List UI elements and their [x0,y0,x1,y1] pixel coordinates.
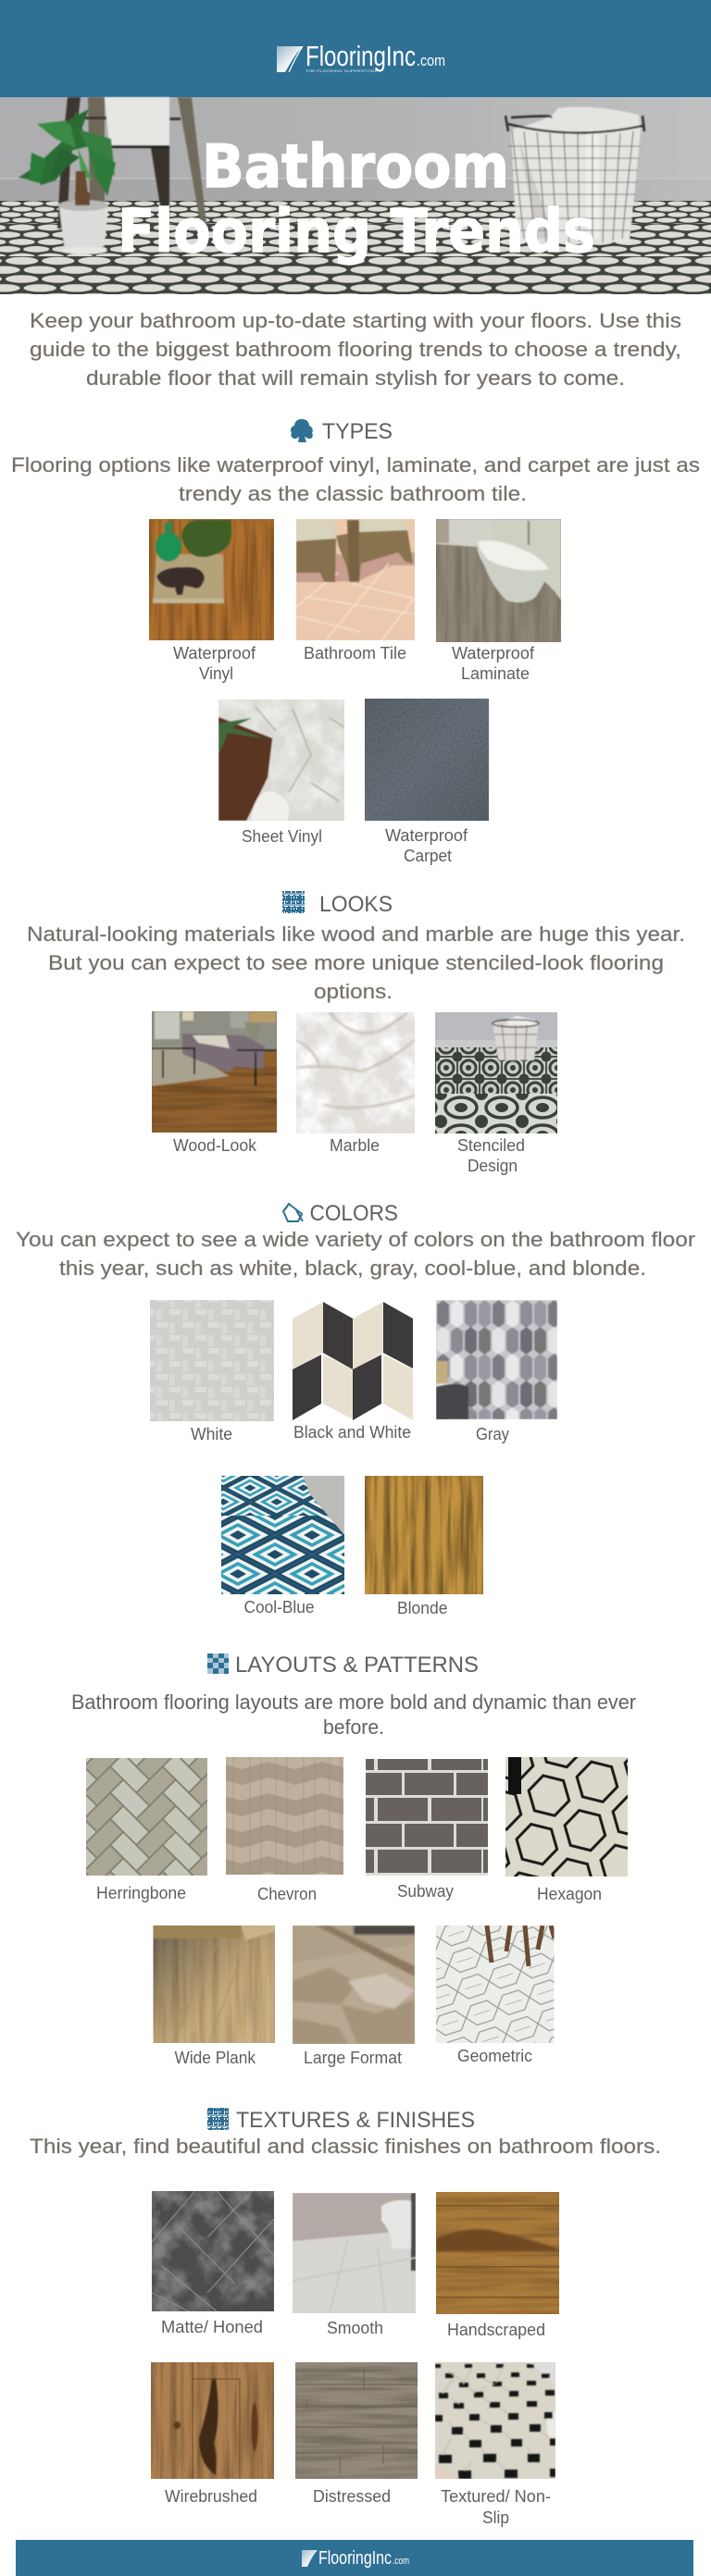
caption: Sheet Vinyl [242,827,322,846]
card: textured non-slip [435,2362,555,2527]
heading: looks: LOOKS [319,892,393,917]
icon: tree [291,419,313,442]
caption: Herringbone [96,1884,186,1902]
photo [435,1012,557,1133]
photo [221,1476,344,1594]
caption: Design [468,1157,518,1175]
photo [293,1926,415,2044]
card: large format [293,1926,415,2067]
photo [293,2193,416,2313]
description: before. [323,1715,384,1739]
caption [441,2487,551,2527]
card: waterproof laminate [436,519,561,683]
heading: looks [282,891,393,917]
intro text [30,309,681,390]
caption [173,644,256,683]
photo [365,1476,483,1594]
description [16,1228,695,1280]
card: herringbone [86,1758,207,1902]
card: waterproof vinyl [149,519,274,683]
panel: layouts and patterns [71,1653,636,2067]
panel: textures and finishes [30,2108,661,2527]
card: marble [296,1012,415,1155]
heading: layouts and patterns: LAYOUTS & PATTERNS [235,1653,479,1678]
footer logo: .com [393,2556,409,2567]
card: distressed [295,2362,418,2506]
photo [226,1757,343,1875]
description: options. [314,980,393,1003]
photo [365,699,489,821]
card: wirebrushed [151,2362,274,2506]
panel: types [11,419,700,865]
card: blonde [365,1476,483,1617]
intro text: guide to the biggest bathroom flooring trends to choose a trendy, [30,338,681,361]
card: handscraped [436,2192,559,2339]
footer logo: FlooringInc [318,2548,392,2569]
card: smooth [293,2193,416,2337]
caption: Gray [476,1425,509,1443]
caption: Distressed [313,2487,391,2506]
caption [385,826,468,865]
caption: Bathroom Tile [304,644,406,663]
caption [452,644,535,683]
panel: looks [27,891,685,1175]
card: subway [366,1759,488,1901]
caption: Waterproof [452,644,535,663]
photo [296,1012,415,1133]
description: You can expect to see a wide variety of colors on the bathroom floor [16,1228,695,1251]
description [11,453,700,505]
title: Bathroom [202,133,509,202]
photo [150,1300,274,1421]
logo: FlooringInc.com: .com [417,52,445,69]
photo [218,700,344,821]
card: white [150,1300,274,1443]
card: gray [436,1300,557,1443]
description: this year, such as white, black, gray, cool-blue, and blonde. [59,1257,646,1280]
card: black and white [293,1302,413,1442]
card: cool-blue [221,1476,344,1616]
footer band [16,2540,693,2576]
icon: woven tiles [207,2108,229,2130]
photo [86,1758,207,1876]
caption: Smooth [327,2319,383,2337]
card: wide plank [154,1926,276,2067]
icon: checkerboard [207,1653,229,1674]
card: bathroom tile [296,519,415,663]
photo [436,519,561,642]
logo: FlooringInc.com: FlooringInc [306,40,416,72]
caption: Wood-Look [173,1136,257,1155]
caption: Wide Plank [174,2049,256,2067]
photo [436,1926,554,2043]
caption: Handscraped [447,2321,545,2339]
description: This year, find beautiful and classic finishes on bathroom floors. [30,2135,661,2158]
photo [152,2191,274,2311]
header band [0,0,711,97]
caption: Waterproof [385,826,468,845]
caption: Cool-Blue [244,1598,315,1616]
card: wood-look [152,1011,277,1155]
card: matte honed [152,2187,274,2336]
caption: Vinyl [199,664,233,683]
caption: Large Format [304,2049,402,2067]
caption: White [191,1425,232,1443]
photo [435,2362,555,2479]
heading: types [291,419,393,444]
description [27,923,685,1003]
caption: Marble [330,1136,380,1155]
caption: Carpet [404,847,452,865]
caption: Slip [482,2508,509,2527]
photo [366,1759,488,1876]
card: chevron [226,1757,343,1903]
caption: Wirebrushed [165,2487,257,2506]
caption: Blonde [397,1599,448,1617]
description: Natural-looking materials like wood and marble are huge this year. [27,923,685,946]
photo [293,1302,413,1420]
hero photo and title [0,97,711,294]
caption: Hexagon [537,1885,602,1903]
description: trendy as the classic bathroom tile. [179,482,527,505]
caption: Waterproof [173,644,256,663]
description: Bathroom flooring layouts are more bold and dynamic than ever [71,1690,636,1714]
description [71,1690,636,1739]
card: sheet vinyl [218,700,344,846]
caption: Laminate [461,664,530,683]
photo [505,1757,628,1876]
card: hexagon [505,1757,628,1903]
icon: woven tiles [282,891,305,913]
caption: Stenciled [457,1136,525,1155]
caption: Matte/ Honed [161,2318,263,2336]
description: Flooring options like waterproof vinyl, laminate, and carpet are just as [11,453,700,477]
photo [152,1011,277,1133]
caption [457,1136,525,1175]
photo [436,2192,559,2314]
photo [296,519,415,640]
photo [154,1926,275,2043]
caption: Textured/ Non- [441,2487,551,2506]
heading: colors: COLORS [309,1201,398,1226]
photo [149,519,274,640]
photo [436,1300,557,1419]
caption: Subway [397,1882,454,1901]
icon: paint bucket [283,1204,303,1221]
caption: Black and White [293,1423,411,1442]
title: Flooring Trends [118,198,595,266]
photo [295,2362,418,2479]
description: But you can expect to see more unique stenciled-look flooring [48,951,664,974]
intro text: durable floor that will remain stylish for years to come. [86,366,625,390]
panel: colors [16,1201,695,1617]
heading: textures and finishes: TEXTURES & FINISHES [236,2108,475,2133]
caption: Geometric [457,2047,532,2065]
intro text: Keep your bathroom up-to-date starting with your floors. Use this [30,309,681,332]
hero photo [0,97,711,294]
title [118,133,595,266]
card: geometric [436,1926,555,2065]
caption: Chevron [257,1885,317,1903]
card: stenciled design [435,1012,557,1175]
logo: FlooringInc.com: THE FLOORING SUPERSTORE [306,68,378,73]
heading: types: TYPES [322,419,393,444]
photo [151,2362,274,2479]
card: waterproof carpet [365,699,489,865]
